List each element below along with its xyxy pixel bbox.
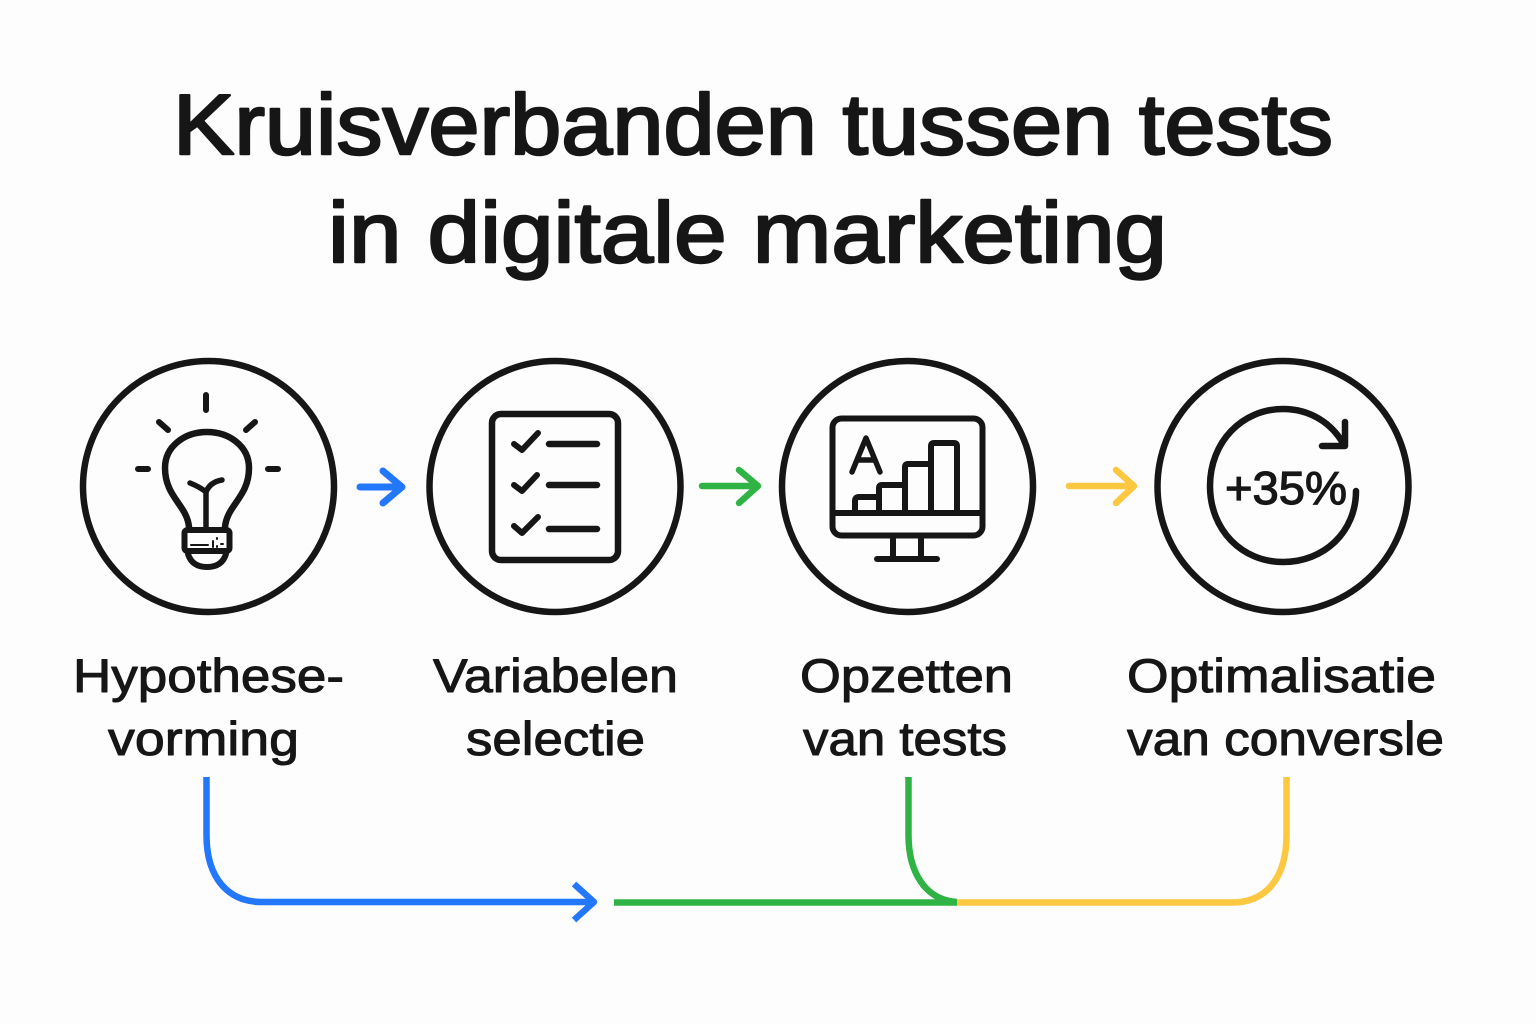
connector: green line from tests — [614, 777, 957, 902]
label: Opzetten van tests — [800, 649, 1013, 765]
label: Variabelen selectie: Variabelen — [433, 649, 678, 702]
step 2: variables circle with checklist icon — [430, 361, 680, 612]
arrow: green step arrow — [702, 470, 758, 503]
label: Variabelen selectie: selectie — [466, 712, 645, 765]
arrow: yellow step arrow — [1069, 470, 1134, 503]
label: Hypothese-vorming — [73, 649, 344, 765]
title: Kruisverbanden tussen tests — [173, 78, 1333, 173]
step 4: optimisation circle with growth loop icon — [1158, 361, 1408, 612]
step 3: test setup circle with monitor icon — [782, 361, 1033, 612]
connector: yellow line from optimisation — [957, 777, 1286, 902]
metric: +35%: +35% — [1225, 462, 1347, 514]
arrow: blue step arrow — [360, 471, 402, 503]
label: Opzetten van tests: van tests — [803, 712, 1007, 765]
connector: blue arrow from hypothesis — [206, 777, 594, 920]
label: Hypothese-vorming: vorming — [108, 712, 299, 765]
label: Opzetten van tests: Opzetten — [800, 649, 1013, 702]
icon: checklist — [492, 414, 618, 560]
icon: light bulb — [138, 395, 278, 567]
label: Hypothese-vorming: Hypothese- — [73, 649, 344, 702]
step 1: hypothesis circle with light bulb icon — [83, 361, 334, 612]
title — [173, 78, 1333, 281]
label: Optimalisatie van conversie: van conversle — [1127, 712, 1444, 765]
icon: circular arrow — [1210, 409, 1356, 562]
title: in digitale marketing — [328, 186, 1167, 281]
icon: monitor with bar chart — [832, 418, 982, 559]
label: Optimalisatie van conversie — [1127, 649, 1444, 765]
label: Variabelen selectie — [433, 649, 678, 765]
label: Optimalisatie van conversie: Optimalisatie — [1127, 649, 1436, 702]
